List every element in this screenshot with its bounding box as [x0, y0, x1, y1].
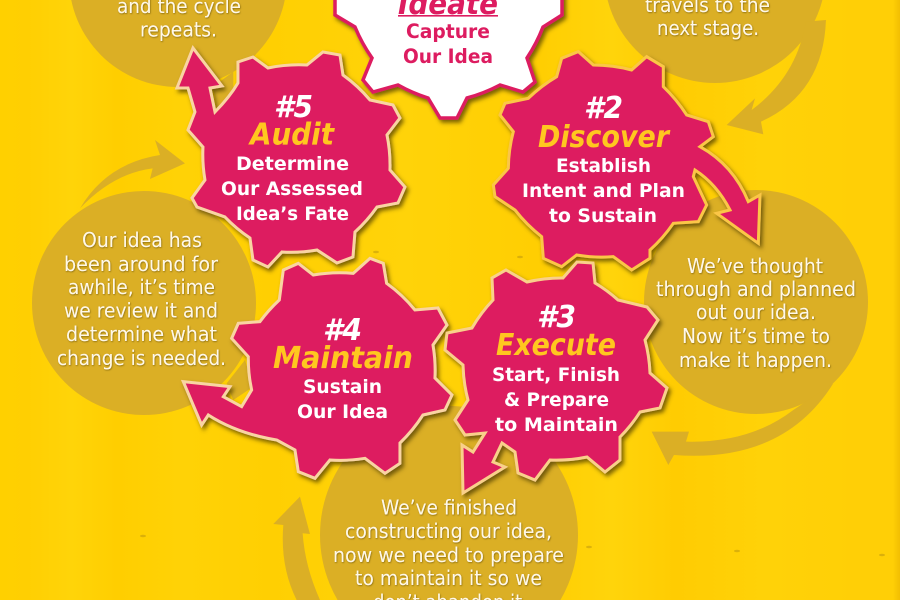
gear text 5: Audit	[248, 118, 336, 152]
gear text 1	[398, 0, 498, 68]
text: review: Our idea has	[82, 228, 202, 252]
text: planned: through and planned	[656, 277, 856, 301]
gear text 5: Our Assessed	[221, 178, 363, 200]
gear text 2: Discover	[538, 120, 671, 155]
circle: review	[32, 191, 256, 415]
gear shape 5 with arrow	[177, 48, 405, 267]
gear text 4: Sustain	[303, 376, 382, 398]
arrow: next stage to discover	[727, 20, 826, 134]
text: planned: out our idea.	[696, 300, 816, 324]
text: planned: Now it’s time to	[682, 324, 830, 348]
arrow: planned to execute	[652, 383, 833, 465]
text: finished: now we need to prepare	[333, 543, 564, 567]
text: finished	[333, 496, 564, 600]
circle: next stage	[604, 0, 826, 83]
gear text 2: Intent and Plan	[522, 180, 685, 202]
gear text 4	[273, 313, 413, 423]
text: review: determine what	[66, 322, 217, 346]
circle: repeat	[69, 0, 287, 87]
gear shape 3 with arrow	[445, 262, 667, 493]
gear text 5: Idea’s Fate	[236, 203, 349, 225]
circle: planned	[644, 190, 868, 414]
gear text 3: & Prepare	[504, 389, 609, 411]
text: review: change is needed.	[57, 346, 226, 370]
wedge: behind audit arrow	[213, 72, 233, 110]
text: review: awhile, it’s time	[68, 275, 215, 299]
gear text 5	[221, 90, 363, 225]
arrow: finished to maintain	[273, 497, 320, 600]
text: repeat: repeats.	[140, 18, 217, 42]
gear text 3: Execute	[496, 328, 616, 363]
arrow: review to audit	[80, 140, 185, 208]
gear text 3: #3	[537, 300, 576, 335]
gear text 3: Start, Finish	[492, 364, 620, 386]
text: review: been around for	[64, 252, 219, 276]
wall dents	[140, 251, 885, 556]
circle: finished	[320, 406, 578, 600]
gear shape 4 with arrow	[183, 258, 452, 478]
text: finished: to maintain it so we	[355, 566, 542, 590]
gear text 1: Our Idea	[403, 45, 493, 68]
gear 3: execute	[445, 262, 667, 493]
text: planned	[656, 254, 856, 372]
text: repeat	[117, 0, 241, 42]
gear 4: maintain	[183, 258, 452, 478]
gear text 4: Maintain	[273, 341, 413, 376]
gear 5: audit	[177, 48, 405, 267]
gear text 1: Capture	[406, 20, 490, 43]
gear text 5: Determine	[236, 153, 349, 175]
wedge: behind maintain arrow	[227, 360, 253, 400]
text: next stage: next stage.	[657, 16, 759, 40]
gear text 2: to Sustain	[549, 205, 657, 227]
text: next stage	[645, 0, 770, 40]
gear text 3: to Maintain	[495, 414, 618, 436]
gear shape 1	[335, 0, 562, 118]
gear 1: ideate	[335, 0, 562, 118]
text: planned: We’ve thought	[687, 254, 823, 278]
text: finished: We’ve finished	[381, 496, 517, 520]
gear text 4: #4	[323, 313, 362, 348]
gear text 2: Establish	[556, 155, 651, 177]
gear text 4: Our Idea	[297, 401, 388, 423]
gear text 2: #2	[584, 91, 623, 126]
text: review: we review it and	[64, 298, 218, 322]
gear 2: discover	[493, 52, 760, 270]
text: planned: make it happen.	[679, 348, 832, 372]
text: finished: constructing our idea,	[345, 519, 552, 543]
gear shape 2 with arrow	[493, 52, 760, 270]
gear text 3	[492, 300, 620, 436]
gear text 5: #5	[274, 90, 313, 125]
text: review	[57, 228, 226, 370]
gear text 2	[522, 91, 685, 227]
